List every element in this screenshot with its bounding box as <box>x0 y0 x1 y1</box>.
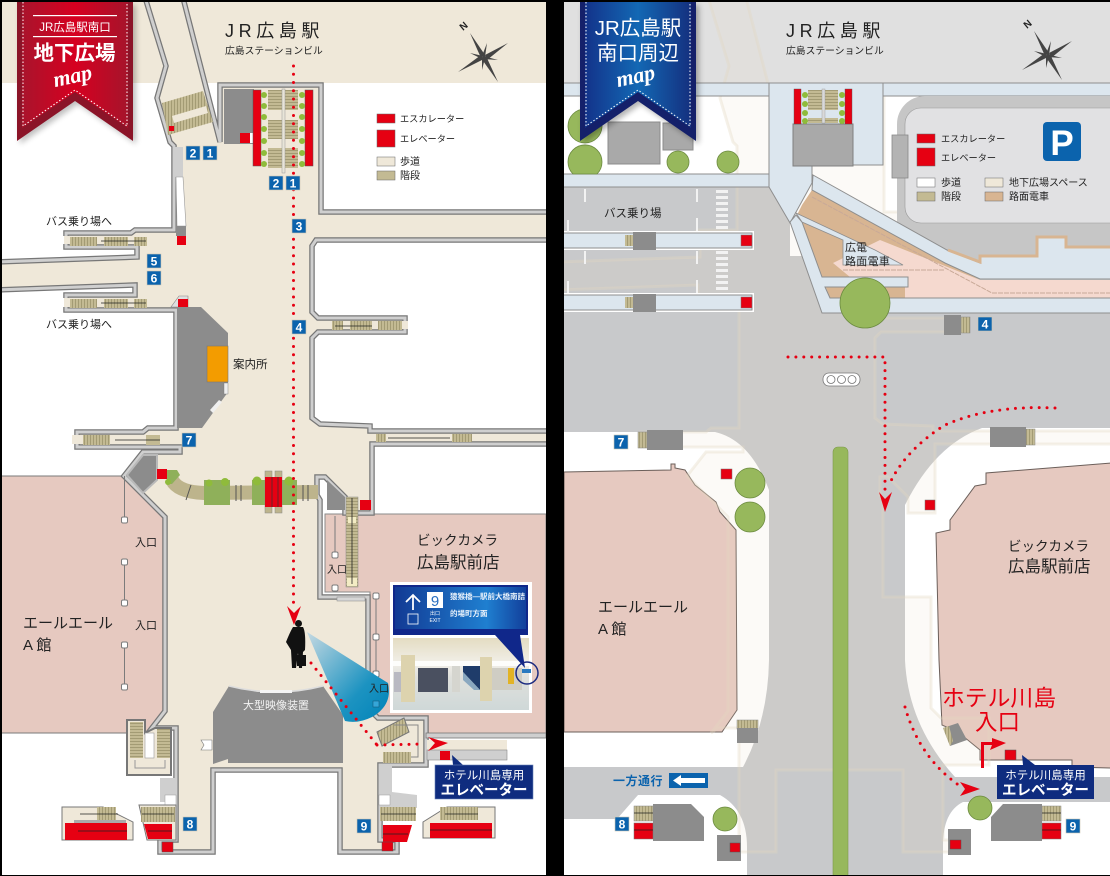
bus platforms <box>560 231 754 312</box>
legend: left map: 歩道 <box>400 155 420 168</box>
exit number badges: right map: 4 <box>982 318 989 332</box>
labels: right map: 広島ステーションビル <box>786 44 884 57</box>
ribbon: underground plaza: 地下広場 <box>34 42 116 65</box>
building: Ale-Ale A surface <box>564 464 737 732</box>
labels: right map: バス乗り場 <box>604 207 662 220</box>
panel: south exit surroundings map <box>557 0 1110 876</box>
gray triangle and vertical escalator <box>327 480 371 601</box>
legend: left map: エレベーター <box>400 134 455 144</box>
photo callout: exit sign: EXIT <box>429 618 441 624</box>
median strip <box>833 447 848 876</box>
wall services near bus corridor <box>175 147 186 245</box>
exit number badges: left map <box>147 146 371 834</box>
bottom stairs left <box>634 804 741 861</box>
exit number badges: left map: 3 <box>296 220 303 234</box>
photo callout: exit sign <box>390 582 538 713</box>
hotel entrance label: 入口 <box>975 710 1020 735</box>
side stairs <box>83 321 472 445</box>
exit number badges: right map: 9 <box>1070 820 1077 834</box>
exit number badges: left map: 7 <box>186 434 193 448</box>
legend: right map: エスカレーター <box>941 134 1005 144</box>
photo callout: exit sign: 9 <box>431 593 439 610</box>
labels: right map: A 館 <box>598 621 626 638</box>
route arrows <box>879 492 1006 796</box>
detached stairs right <box>423 807 495 838</box>
hotel entrance label: ホテル川島 <box>942 686 1056 711</box>
exit number badges: left map: 4 <box>296 320 303 334</box>
hotel elevator label <box>997 755 1094 799</box>
red route dots <box>788 357 1055 788</box>
compass: left map <box>458 20 508 82</box>
traffic light <box>823 373 860 386</box>
labels: left map: バス乗り場へ <box>46 215 112 228</box>
exit number badges: left map: 6 <box>151 272 158 286</box>
exit number badges: left map: 9 <box>361 820 368 834</box>
hotel elevator label: エレベーター <box>1002 782 1089 799</box>
exit number badges: left map: 8 <box>187 818 194 832</box>
labels: left map: ビックカメラ <box>417 533 498 548</box>
stairs: bus corridors <box>70 237 188 308</box>
labels: right map: JR広島駅 <box>786 21 885 41</box>
labels: left map: 入口 <box>369 684 389 695</box>
info centre block <box>177 307 228 428</box>
detached stairs left <box>62 807 133 840</box>
panel: underground plaza map <box>0 0 556 875</box>
gray buildings beneath ribbon <box>608 122 693 164</box>
ribbon: south exit surroundings: map <box>614 59 657 92</box>
photo callout: exit sign: 猿猴橋―駅前大橋南詰 <box>450 591 525 601</box>
hexagonal gray block <box>127 455 167 493</box>
labels: left map: エールエール <box>23 615 113 632</box>
legend: left map: エスカレーター <box>400 114 464 124</box>
hotel elevator label: エレベーター <box>440 782 528 799</box>
hotel elevator label: ホテル川島専用 <box>444 768 524 782</box>
labels: left map <box>23 21 500 707</box>
compass: right map: N <box>1022 18 1034 31</box>
underground floor walkways <box>0 0 556 852</box>
exit number badges: left map: 2 <box>273 176 280 190</box>
exit number badges: right map: 8 <box>619 818 626 832</box>
ribbon: south exit surroundings: JR広島駅 <box>595 17 681 40</box>
labels: left map: 入口 <box>327 565 347 576</box>
bottom stairs right <box>948 804 1061 855</box>
hotel elevator label <box>435 755 533 799</box>
hotel elevator label: ホテル川島専用 <box>1005 768 1086 782</box>
trees <box>568 109 992 831</box>
labels: right map: ビックカメラ <box>1008 539 1089 554</box>
exit number badges: right map <box>614 317 1080 834</box>
stair entrances on street <box>638 315 1035 746</box>
legend: right map: エレベーター <box>941 153 996 163</box>
labels: right map: 広電 <box>845 241 867 254</box>
labels: left map: 入口 <box>135 537 157 549</box>
labels: left map: A 館 <box>23 637 51 654</box>
labels: left map: JR広島駅 <box>225 21 324 41</box>
legend: left map: 階段 <box>400 169 420 182</box>
legend: left map <box>377 114 464 182</box>
entrances: dotted door markers <box>122 476 379 690</box>
exit number badges: left map: 1 <box>207 146 214 160</box>
photo callout: exit sign: 的場町方面 <box>450 608 488 618</box>
exit number badges: left map: 5 <box>151 254 158 268</box>
parking sign <box>1043 122 1081 163</box>
exit number badges: left map: 1 <box>290 176 297 190</box>
labels: right map: 路面電車 <box>845 254 890 268</box>
hotel corridor and elevator <box>426 733 546 760</box>
parking lot <box>892 96 1110 266</box>
stair block lower right <box>377 718 418 851</box>
station concourse <box>793 89 853 166</box>
large video screen block <box>201 686 343 764</box>
building: Bic Camera surface <box>936 463 1110 768</box>
parking sign: P <box>1050 124 1074 163</box>
ribbon: underground plaza <box>17 2 136 144</box>
labels: right map: 広島駅前店 <box>1008 557 1090 576</box>
building: Ale-Ale A <box>0 476 165 733</box>
one-way sign: 一方通行 <box>613 773 663 788</box>
sidewalk strips <box>560 83 1110 223</box>
legend: right map: 地下広場スペース <box>1009 176 1088 189</box>
station concourse block <box>224 89 313 173</box>
large video screen block: 大型映像装置 <box>243 698 309 712</box>
labels: left map: 広島駅前店 <box>417 553 500 572</box>
route dots <box>294 66 424 745</box>
labels: left map: バス乗り場へ <box>46 318 112 331</box>
labels: left map: 案内所 <box>233 357 268 371</box>
labels: left map: 広島ステーションビル <box>225 44 323 57</box>
legend: right map: 路面電車 <box>1009 190 1049 203</box>
hotel elevator <box>1005 750 1016 760</box>
labels: right map: エールエール <box>598 599 688 616</box>
exit number badges: right map: 7 <box>618 436 625 450</box>
labels: left map: 入口 <box>135 620 157 632</box>
plaza stairs and greenery <box>165 470 318 513</box>
compass: right map <box>1022 18 1072 80</box>
legend: right map <box>917 134 1088 203</box>
legend: right map: 階段 <box>941 190 961 203</box>
photo callout: exit sign: 出口 <box>430 610 440 617</box>
route arrow right <box>428 737 448 751</box>
ribbon: underground plaza: JR広島駅南口 <box>39 20 111 34</box>
sight cone from figure <box>307 632 389 722</box>
legend: right map: 歩道 <box>941 176 961 189</box>
crosswalk and lane marks <box>567 189 728 293</box>
stair block lower left <box>127 720 176 852</box>
ribbon: south exit surroundings: 南口周辺 <box>597 42 679 65</box>
tram tracks area <box>790 175 1110 313</box>
building: Bic Camera floor area <box>325 514 546 737</box>
faint underground plan overlay <box>557 0 1110 852</box>
route arrow down <box>287 606 301 625</box>
ribbon: south exit surroundings <box>580 2 699 144</box>
figure silhouette <box>286 620 306 668</box>
ribbon: underground plaza: map <box>51 59 94 92</box>
compass: left map: N <box>458 20 470 33</box>
white sidewalks <box>564 96 1110 875</box>
one-way sign <box>613 773 708 788</box>
hotel entrance label <box>942 686 1056 735</box>
angled stairs <box>162 91 213 135</box>
exit number badges: left map: 2 <box>190 146 197 160</box>
labels: right map <box>598 21 1090 638</box>
